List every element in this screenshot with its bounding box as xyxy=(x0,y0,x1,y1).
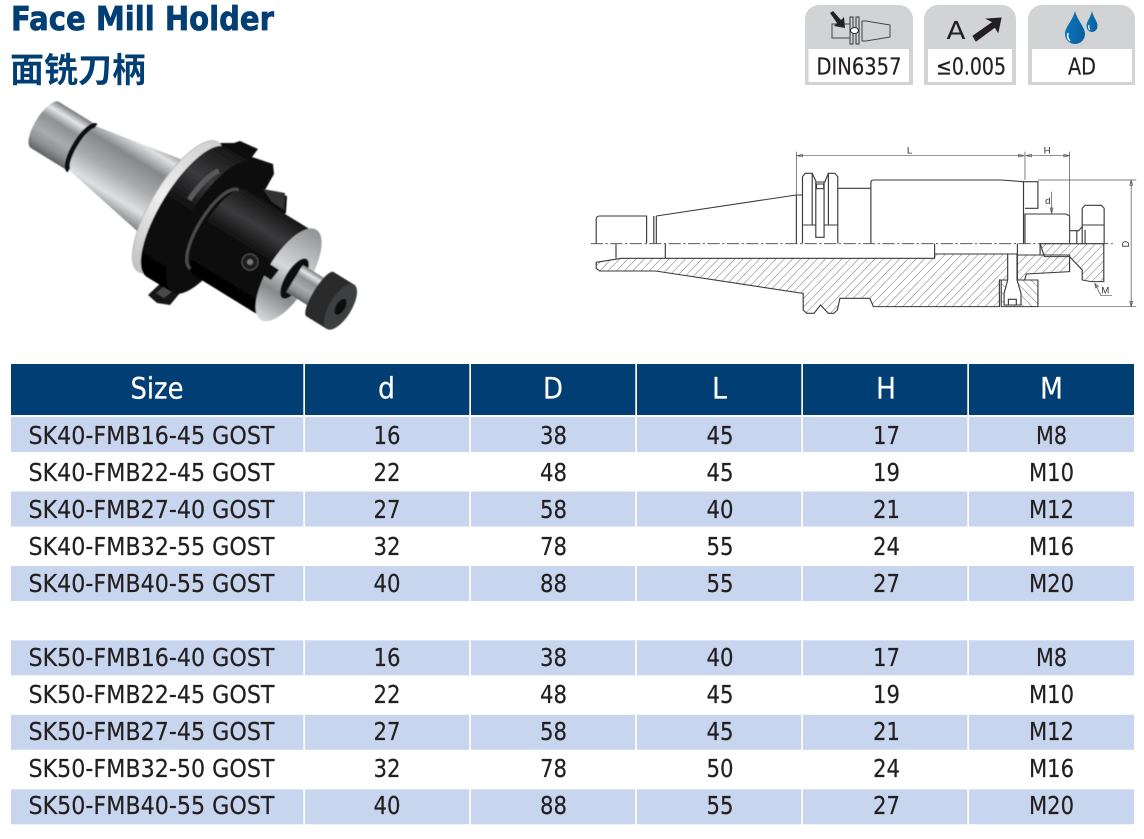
icon: holder with arrow xyxy=(830,11,890,44)
row: SK50-FMB40-55: 55 xyxy=(706,791,734,820)
row: SK50-FMB16-40: 16 xyxy=(374,643,400,672)
spindle collar xyxy=(275,254,314,303)
center line xyxy=(591,242,1113,245)
screw cap xyxy=(301,268,354,329)
end face xyxy=(243,219,334,331)
row: SK40-FMB40-55: SK40-FMB40-55 GOST xyxy=(28,569,275,598)
dimension H: H xyxy=(1044,146,1051,155)
product photo: face mill holder xyxy=(0,55,390,377)
body xyxy=(179,181,315,317)
row: SK40-FMB27-40: 40 xyxy=(706,495,734,524)
row: SK40-FMB40-55 xyxy=(11,566,1134,601)
row: SK40-FMB16-45: 45 xyxy=(706,421,734,450)
shank xyxy=(22,97,93,169)
chinese title: 面铣刀柄 xyxy=(10,52,146,90)
technical drawing xyxy=(591,146,1136,313)
row: SK40-FMB27-40: 21 xyxy=(873,495,900,524)
row: SK50-FMB32-50: 24 xyxy=(873,754,900,783)
row: SK40-FMB32-55: M16 xyxy=(1029,532,1074,561)
row: SK40-FMB22-45: 48 xyxy=(540,458,567,487)
row: SK50-FMB40-55: SK50-FMB40-55 GOST xyxy=(28,791,275,820)
row: SK40-FMB27-40: SK40-FMB27-40 GOST xyxy=(28,495,275,524)
badge: DIN6357 standard xyxy=(805,5,913,85)
row: SK50-FMB22-45: 22 xyxy=(374,680,400,709)
row: SK40-FMB40-55: 40 xyxy=(374,569,400,598)
row: SK50-FMB27-45: 45 xyxy=(706,717,734,746)
row: SK40-FMB27-40: M12 xyxy=(1029,495,1074,524)
icon: A and arrow: A xyxy=(946,16,966,45)
bore lines xyxy=(616,244,1040,258)
row: SK50-FMB27-45: 58 xyxy=(540,717,567,746)
table header: H xyxy=(876,371,896,405)
row: SK40-FMB32-55: SK40-FMB32-55 GOST xyxy=(28,532,275,561)
row: SK50-FMB40-55: M20 xyxy=(1029,791,1074,820)
title: Face Mill Holder xyxy=(11,0,275,38)
cutter teeth xyxy=(148,141,287,305)
table header: M xyxy=(1040,371,1063,405)
row: SK40-FMB16-45: SK40-FMB16-45 GOST xyxy=(28,421,275,450)
hatched section: retaining screw xyxy=(1040,244,1104,282)
table header: D xyxy=(543,371,563,405)
upper outline xyxy=(596,173,1104,243)
row: SK50-FMB32-50: M16 xyxy=(1029,754,1074,783)
table xyxy=(11,364,1134,824)
row: SK50-FMB22-45: 48 xyxy=(540,680,567,709)
dimension M: M xyxy=(1101,286,1110,296)
dimension d: d xyxy=(1045,196,1051,206)
row: SK50-FMB40-55 xyxy=(11,789,1134,824)
table header: Size xyxy=(130,371,184,405)
row: SK50-FMB32-50: 32 xyxy=(374,754,400,783)
row: SK40-FMB22-45 xyxy=(28,458,1074,487)
row: SK40-FMB22-45: M10 xyxy=(1029,458,1074,487)
dimension d xyxy=(1045,192,1053,213)
row: SK50-FMB32-50: SK50-FMB32-50 GOST xyxy=(28,754,275,783)
table header: L xyxy=(712,371,727,405)
black ring xyxy=(62,122,96,170)
table header xyxy=(11,364,1134,415)
row: SK50-FMB27-45: SK50-FMB27-45 GOST xyxy=(28,717,275,746)
badge: runout accuracy: ≤0.005 xyxy=(936,54,1006,80)
row: SK40-FMB16-45 xyxy=(11,417,1134,452)
dimension D xyxy=(1038,180,1136,307)
hatched section: main body xyxy=(596,254,1008,313)
hatched section: drive key xyxy=(1001,280,1038,307)
row: SK40-FMB27-40: 27 xyxy=(374,495,400,524)
row: SK50-FMB22-45: 19 xyxy=(873,680,900,709)
row: SK50-FMB22-45 xyxy=(28,680,1074,709)
badge: AD coolant xyxy=(1028,5,1135,85)
row: SK40-FMB32-55: 78 xyxy=(540,532,567,561)
row: SK50-FMB16-40 xyxy=(11,640,1134,675)
row: SK40-FMB22-45: 22 xyxy=(374,458,400,487)
row: SK50-FMB40-55: 88 xyxy=(540,791,567,820)
clamp screw xyxy=(242,253,279,280)
row: SK40-FMB40-55: 88 xyxy=(540,569,567,598)
row: SK40-FMB22-45: SK40-FMB22-45 GOST xyxy=(28,458,275,487)
dimension D: D xyxy=(1121,241,1131,247)
row: SK40-FMB40-55: 55 xyxy=(706,569,734,598)
row: SK50-FMB16-40: M8 xyxy=(1036,643,1067,672)
table header: d xyxy=(378,371,395,405)
row: SK40-FMB40-55: 27 xyxy=(873,569,900,598)
dimension L: L xyxy=(907,146,912,155)
row: SK40-FMB32-55: 55 xyxy=(706,532,734,561)
row: SK50-FMB22-45: SK50-FMB22-45 GOST xyxy=(28,680,275,709)
row: SK50-FMB22-45: 45 xyxy=(706,680,734,709)
row: SK40-FMB16-45: 17 xyxy=(873,421,900,450)
row: SK40-FMB40-55: M20 xyxy=(1029,569,1074,598)
row: SK50-FMB40-55: 27 xyxy=(873,791,900,820)
silver flange xyxy=(116,128,240,285)
row: SK50-FMB32-50 xyxy=(28,754,1074,783)
row: SK50-FMB40-55: 40 xyxy=(374,791,400,820)
badge: DIN6357 standard: DIN6357 xyxy=(816,54,902,80)
row: SK40-FMB32-55 xyxy=(28,532,1074,561)
hatched section: spindle xyxy=(1017,255,1070,280)
row: SK50-FMB16-40: SK50-FMB16-40 GOST xyxy=(28,643,275,672)
row: SK40-FMB32-55: 32 xyxy=(374,532,400,561)
row: SK50-FMB27-45 xyxy=(11,715,1134,750)
dimension L xyxy=(796,146,1025,195)
badge: runout accuracy xyxy=(924,5,1016,85)
row: SK40-FMB27-40 xyxy=(11,492,1134,526)
row: SK50-FMB27-45: 21 xyxy=(873,717,900,746)
black disc xyxy=(124,134,252,292)
row: SK50-FMB16-40: 17 xyxy=(873,643,900,672)
row: SK40-FMB16-45: M8 xyxy=(1036,421,1067,450)
row: SK50-FMB16-40: 38 xyxy=(540,643,567,672)
cone xyxy=(55,108,196,242)
bolt xyxy=(1004,254,1021,305)
row: SK40-FMB16-45: 38 xyxy=(540,421,567,450)
spindle xyxy=(286,265,332,310)
dimension M xyxy=(1095,283,1112,296)
row: SK40-FMB32-55: 24 xyxy=(873,532,900,561)
row: SK50-FMB16-40: 40 xyxy=(706,643,734,672)
row: SK40-FMB27-40: 58 xyxy=(540,495,567,524)
row: SK40-FMB16-45: 16 xyxy=(374,421,400,450)
dimension H xyxy=(1026,146,1070,243)
disc highlight xyxy=(189,166,219,205)
badge: AD coolant: AD xyxy=(1068,54,1096,80)
row: SK40-FMB22-45: 45 xyxy=(706,458,734,487)
row: SK50-FMB32-50: 78 xyxy=(540,754,567,783)
row: SK50-FMB27-45: 27 xyxy=(374,717,400,746)
row: SK50-FMB22-45: M10 xyxy=(1029,680,1074,709)
row: SK40-FMB22-45: 19 xyxy=(873,458,900,487)
row: SK50-FMB32-50: 50 xyxy=(706,754,734,783)
row: SK50-FMB27-45: M12 xyxy=(1029,717,1074,746)
icon: water drops xyxy=(1065,11,1098,44)
